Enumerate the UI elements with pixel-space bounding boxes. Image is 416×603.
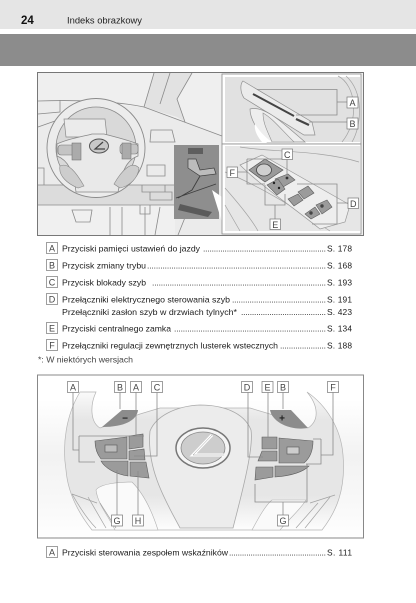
label G: G — [279, 516, 287, 526]
label G: G — [113, 516, 121, 526]
highlighted door area — [174, 145, 219, 219]
list: item B: S. 168 — [327, 260, 352, 270]
page number: 24 — [21, 15, 34, 27]
list: item E: E — [49, 324, 55, 334]
pointer to inset — [212, 190, 222, 222]
label D: D — [350, 199, 357, 209]
mirror switch — [249, 159, 283, 182]
list: item B: Przycisk zmiany trybu — [62, 260, 146, 270]
list: item A — [46, 242, 352, 254]
left paddle: − — [122, 414, 128, 424]
central lock switch — [267, 179, 285, 195]
label E: E — [272, 220, 278, 230]
list: item E — [46, 322, 352, 334]
window switches — [288, 186, 314, 206]
list: item D: D — [49, 294, 56, 304]
label D — [242, 382, 252, 392]
wheel rim and spokes — [65, 392, 344, 530]
label D: D — [244, 382, 251, 392]
list: item F: ..................... — [280, 340, 326, 350]
header band — [0, 0, 416, 66]
label E: E — [264, 382, 271, 392]
lock switch — [275, 174, 295, 187]
label B — [114, 382, 126, 392]
list: item F — [46, 340, 352, 350]
label B: B — [280, 382, 286, 392]
footnote: *: W niektórych wersjach — [38, 354, 133, 364]
right paddle: + — [279, 414, 285, 424]
left paddle — [102, 410, 138, 427]
list: item E: ..................................................................... — [174, 324, 326, 334]
label C: C — [154, 382, 161, 392]
label B: B — [349, 119, 356, 129]
label A: A — [70, 382, 76, 392]
list: item C — [46, 276, 352, 288]
list: item B: ................................................................................. — [147, 260, 326, 270]
list: steering item A: A — [49, 548, 55, 558]
steering wheel — [47, 98, 145, 198]
list: item A: S. 178 — [327, 244, 352, 254]
label B — [278, 382, 288, 392]
label H — [132, 515, 144, 526]
label F: F — [330, 382, 336, 392]
list: item A: A — [49, 244, 55, 254]
label A — [68, 382, 78, 392]
label A: A — [349, 98, 356, 108]
list: item D: ....................................... — [241, 307, 326, 317]
dash surfaces — [38, 101, 222, 235]
list: item F: Przełączniki regulacji zewnętrznych lusterek wstecznych — [62, 340, 278, 350]
Lexus emblem — [176, 428, 230, 468]
list: item C: Przycisk blokady szyb — [62, 278, 146, 288]
list: item C: S. 193 — [327, 278, 352, 288]
list: item D: S. 423 — [327, 307, 352, 317]
leader lines — [73, 392, 333, 515]
right paddle — [270, 410, 308, 429]
inset: door memory buttons — [222, 74, 361, 144]
list: item E: S. 134 — [327, 324, 352, 334]
label A — [130, 382, 142, 392]
lower wheel openings — [96, 482, 158, 530]
left switch pad — [95, 434, 149, 478]
section title: Indeks obrazkowy — [67, 16, 143, 26]
label F: F — [230, 168, 236, 178]
inset: window switches — [222, 144, 361, 234]
right switch pad — [255, 437, 313, 480]
airbag hub — [150, 405, 251, 528]
list: item A: Przyciski pamięci ustawień do jazdy — [62, 244, 201, 254]
list: item C: ............................................................................... — [152, 278, 326, 288]
label H: H — [135, 516, 141, 526]
list: item A: ......................................................... — [203, 244, 326, 254]
list: item D: Przełączniki zasłon szyb w drzwiach tylnych* — [62, 307, 238, 317]
label F — [328, 382, 338, 392]
list: steering item A: Przyciski sterowania zespołem wskaźników — [62, 548, 229, 558]
list: item D: S. 191 — [327, 294, 352, 304]
label C — [152, 382, 162, 392]
leader lines — [237, 159, 348, 224]
label A: A — [133, 382, 139, 392]
panel: steering wheel diagram — [38, 375, 364, 538]
lower rim segments — [72, 494, 335, 528]
list: item D — [46, 294, 352, 317]
list: item B — [46, 260, 352, 270]
list: item D: Przełączniki elektrycznego sterowania szyb — [62, 294, 230, 304]
list: item E: Przyciski centralnego zamka — [62, 324, 171, 334]
label E — [262, 382, 273, 392]
list: steering item A: S. 111 — [327, 548, 352, 558]
list: item F: F — [49, 340, 55, 350]
list: item D: ........................................... — [232, 294, 326, 304]
list: steering item A — [46, 546, 352, 558]
list: item F: S. 188 — [327, 340, 352, 350]
leader lines — [257, 90, 347, 122]
list: item C: C — [49, 278, 56, 288]
list: steering item A: ............................................. — [229, 548, 326, 558]
label G — [112, 515, 122, 526]
panel: car interior diagram — [38, 72, 364, 236]
label C: C — [284, 150, 291, 160]
label B: B — [117, 382, 123, 392]
label G — [278, 515, 288, 526]
list: item B: B — [49, 260, 55, 270]
